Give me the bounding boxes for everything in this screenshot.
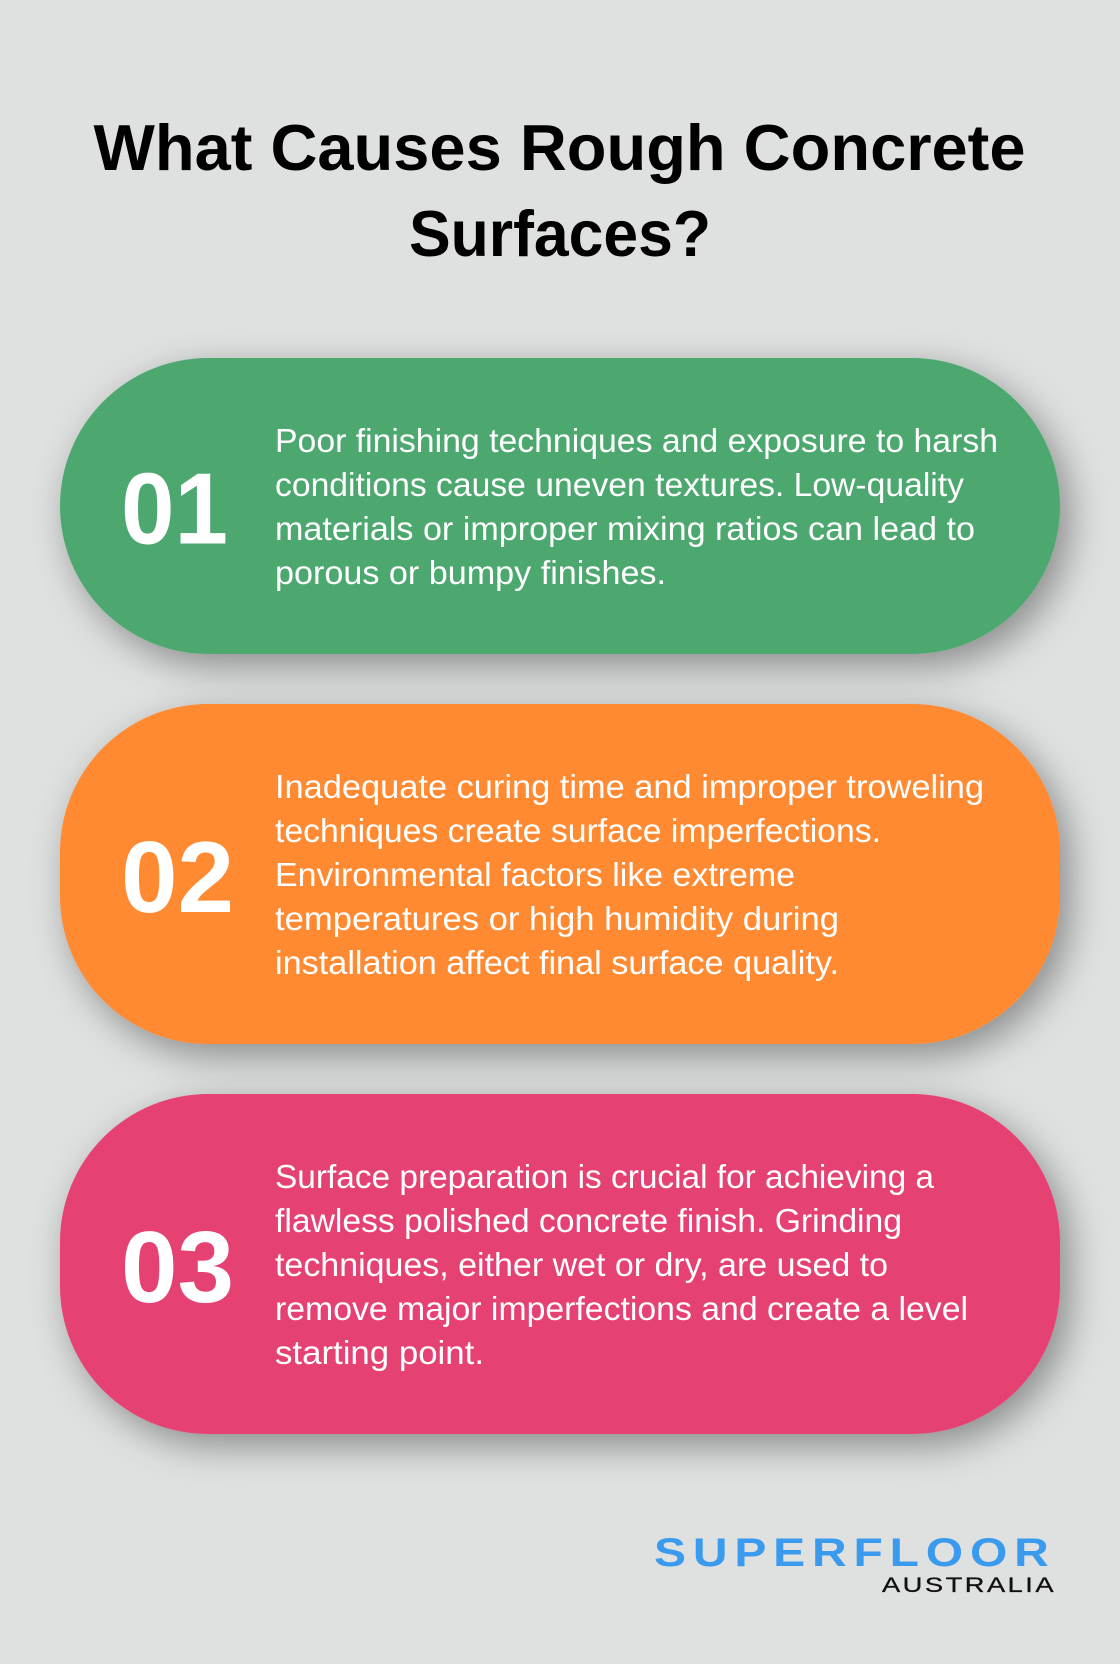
- text block 02: techniques create surface imperfections.: [275, 812, 881, 849]
- number 03: 03: [121, 1212, 234, 1324]
- text block 01: Poor finishing techniques and exposure to harsh: [275, 422, 998, 459]
- text block 03: Surface preparation is crucial for achieving a: [275, 1158, 935, 1195]
- text block 02: temperatures or high humidity during: [275, 900, 839, 937]
- text block 01: materials or improper mixing ratios can lead to: [275, 510, 975, 547]
- text block 02: Environmental factors like extreme: [275, 856, 795, 893]
- text block 02: Inadequate curing time and improper troweling: [275, 768, 984, 805]
- text block 02: [275, 768, 984, 981]
- logo: Superfloor Australia: [654, 1531, 1054, 1597]
- title: Surfaces?: [409, 197, 711, 270]
- text block 01: conditions cause uneven textures. Low-quality: [275, 466, 964, 503]
- text block 03: techniques, either wet or dry, are used to: [275, 1246, 888, 1283]
- pill background orange: [60, 704, 1060, 1044]
- number 02: 02: [121, 822, 234, 934]
- logo: Superfloor Australia: AUSTRALIA: [882, 1574, 1054, 1597]
- title: What Causes Rough Concrete: [94, 111, 1026, 184]
- pill background pink: [60, 1094, 1060, 1434]
- title: [94, 111, 1026, 270]
- panel: cause 03: [60, 1094, 1060, 1434]
- number 01: 01: [121, 454, 228, 566]
- panel: cause 02: [60, 704, 1060, 1044]
- text block 03: starting point.: [275, 1334, 484, 1371]
- logo: Superfloor Australia: SUPERFLOOR: [654, 1531, 1049, 1575]
- panel: cause 01: [60, 358, 1060, 654]
- text block 02: installation affect final surface quality.: [275, 944, 839, 981]
- text block 03: flawless polished concrete finish. Grinding: [275, 1202, 902, 1239]
- text block 03: [275, 1158, 968, 1371]
- text block 03: remove major imperfections and create a level: [275, 1290, 968, 1327]
- text block 01: [275, 422, 998, 591]
- pill background green: [60, 358, 1060, 654]
- text block 01: porous or bumpy finishes.: [275, 554, 666, 591]
